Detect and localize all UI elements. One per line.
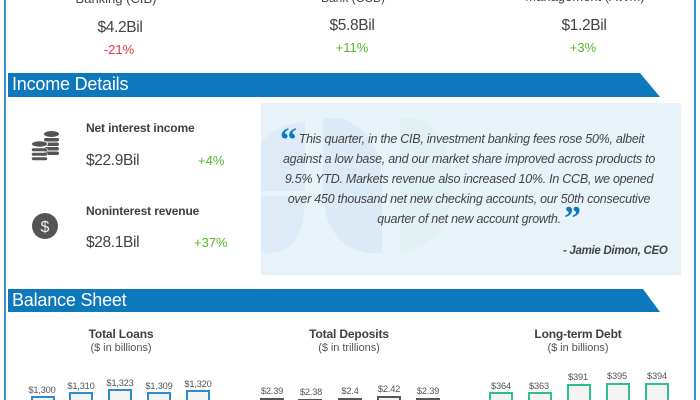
chart: long-term debt: $395 [607, 371, 627, 381]
segment change: +3% [570, 40, 596, 55]
segment: asset management result [525, 0, 645, 55]
label: net interest income: Net interest income [86, 121, 195, 135]
chart: total loans: $1,320 [184, 379, 212, 389]
bars [31, 396, 55, 400]
segment change: -21% [104, 42, 134, 57]
opening quote mark: “ [280, 122, 297, 159]
chart title: Total Deposits [309, 327, 389, 341]
chart subtitle: ($ in billions) [90, 342, 152, 354]
bars [260, 398, 284, 400]
change: noninterest revenue: +37% [194, 235, 228, 250]
chart title: Total Loans [89, 327, 153, 341]
quote text [283, 132, 655, 226]
heading: Income Details [12, 74, 128, 94]
chart: total deposits: $2.4 [341, 386, 359, 396]
heading: Balance Sheet [12, 290, 126, 310]
chart subtitle: ($ in billions) [548, 342, 608, 354]
banner: Income Details [8, 73, 660, 97]
bars [489, 392, 513, 400]
change: net interest income: +4% [198, 153, 224, 168]
quote text: 9.5% YTD. Markets revenue also increased 10%. In CCB, we opened [285, 172, 653, 186]
quote text: over 450 thousand net new checking accounts, our 50th consecutive [288, 192, 650, 206]
icon: coin stacks [32, 131, 59, 160]
quote text: This quarter, in the CIB, investment banking fees rose 50%, albeit [299, 132, 644, 146]
icon: dollar circle: $ [41, 219, 50, 236]
icon: dollar circle [32, 213, 58, 239]
quote text: against a low base, and our market share improved across products to [283, 152, 655, 166]
segment value: $4.2Bil [98, 19, 142, 36]
chart: long-term debt: $363 [529, 381, 549, 391]
chart: total deposits: $2.38 [300, 387, 322, 397]
segment value: $1.2Bil [562, 17, 606, 34]
watermark logo [261, 118, 382, 253]
segment: bank result [321, 0, 385, 55]
chart subtitle: ($ in trillions) [318, 342, 380, 354]
chart: total deposits: $2.39 [417, 386, 439, 396]
value labels: $2.39 [261, 386, 283, 396]
segment: banking result [76, 0, 156, 57]
value: net interest income: $22.9Bil [86, 152, 139, 169]
banner: Balance Sheet [8, 289, 660, 312]
quote text: quarter of net new account growth. [377, 212, 561, 226]
chart: long-term debt: $391 [568, 372, 588, 382]
segment change: +11% [336, 40, 368, 55]
chart: total deposits [260, 327, 440, 400]
chart: total deposits: $2.42 [378, 384, 400, 394]
chart: total loans [28, 327, 212, 400]
closing quote mark: ” [564, 200, 581, 237]
quote attribution: - Jamie Dimon, CEO [563, 245, 668, 257]
value labels: $1,300 [28, 385, 56, 395]
chart title: Long-term Debt [534, 327, 622, 341]
value: noninterest revenue: $28.1Bil [86, 234, 139, 251]
value labels: $364 [491, 381, 511, 391]
chart: total loans: $1,323 [106, 378, 134, 388]
segment value: $5.8Bil [330, 17, 374, 34]
chart: total loans: $1,309 [145, 381, 173, 391]
chart: total loans: $1,310 [67, 381, 95, 391]
chart: long-term debt: $394 [647, 371, 667, 381]
chart: long-term debt [489, 327, 669, 400]
label: noninterest revenue: Noninterest revenue [86, 204, 199, 218]
panel: CEO quote [261, 103, 681, 275]
